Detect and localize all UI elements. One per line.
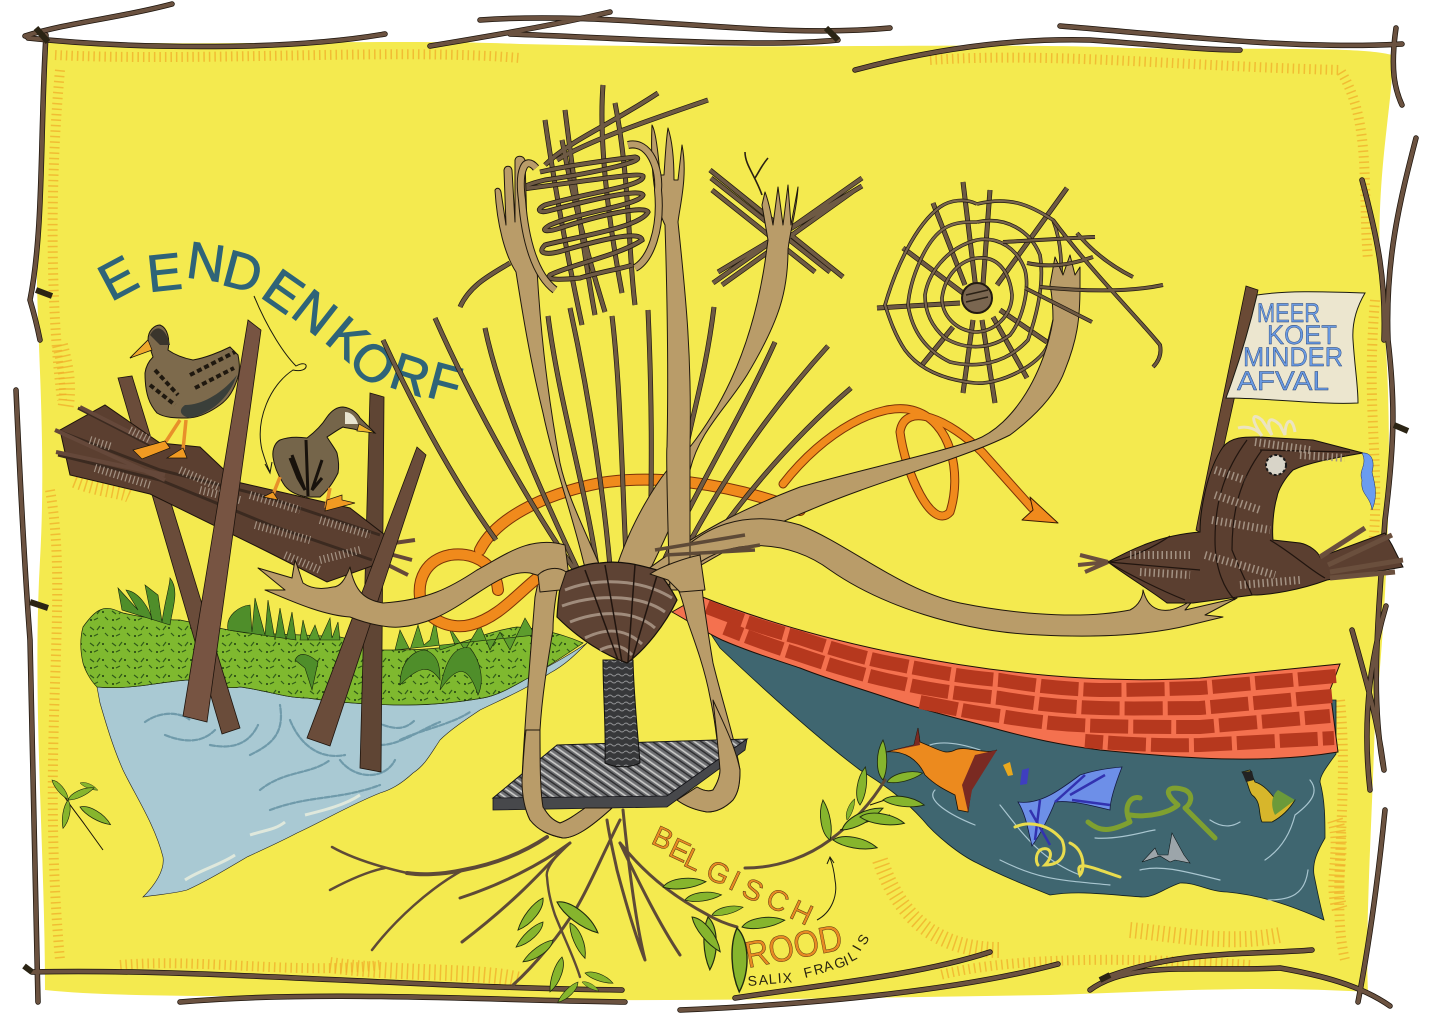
duck standing: [130, 325, 239, 459]
radial willow rods: [383, 307, 851, 590]
raised arm right with hand: [652, 125, 690, 590]
arm to X bundle: [610, 185, 798, 590]
roots under the willow: [330, 810, 737, 985]
plant branch: sprig beside canal: [745, 740, 925, 868]
plant name label: BELGISCH ROOD: ROOD: [742, 917, 846, 976]
brick wall: [672, 596, 1340, 759]
raised arm left with hand: [495, 156, 610, 590]
willow leaves on roots: [514, 876, 785, 1005]
arm to spider web: [640, 255, 1080, 590]
hands gripping basket: [538, 555, 705, 592]
slogan text on flag: MEER: [1257, 298, 1320, 328]
trash: green strap: [1088, 788, 1215, 838]
center woven basket: [557, 535, 760, 663]
trash: yellow ribbon: [1015, 824, 1120, 877]
crest feathers: [1238, 417, 1295, 436]
plant name label: BELGISCH ROOD: BELGISCH: [647, 820, 818, 932]
orange ribbon: [420, 409, 1058, 626]
trash: grey scrap: [1142, 833, 1190, 863]
trash: bottle: [1242, 770, 1295, 822]
grass tufts: [118, 578, 535, 695]
slogan text on flag: [1237, 298, 1343, 396]
back stakes: [118, 376, 384, 772]
polluted canal water: [695, 610, 1336, 920]
spider web weave: [877, 182, 1067, 403]
lower arm left around stem: [522, 570, 612, 838]
re-draw arm over board: [522, 730, 612, 838]
web tails over hand: [1003, 220, 1163, 367]
duck from behind: [263, 407, 375, 511]
slogan text on flag: MINDER: [1243, 342, 1343, 372]
left thumb wrapping panel: [521, 163, 555, 290]
grey board: [493, 739, 747, 810]
slogan text on flag: KOET: [1267, 320, 1337, 350]
front stakes: [183, 320, 426, 746]
trash: orange cloth: [886, 728, 1029, 812]
lower arm right around stem: [647, 557, 740, 812]
bird eye: [1266, 455, 1286, 475]
blue drip: [1361, 453, 1375, 510]
arrow: label to branch: [817, 857, 836, 920]
arm to duck nest with hand: [258, 542, 570, 627]
flagpole and flag: [1196, 286, 1365, 535]
grass bank: [81, 578, 583, 705]
right thumb wrapping panel: [628, 144, 659, 268]
arrow: label to duck: [254, 296, 306, 473]
title: EENDENKORF: EENDENKORF: [89, 231, 468, 416]
woven panel on raised hands: [460, 85, 708, 325]
re-draw right arm over board: [677, 700, 740, 812]
duck nest basket with stakes: [55, 320, 426, 772]
X-shaped rod bundle: [710, 152, 862, 285]
woven nest body: [60, 405, 385, 582]
woven coot bird: [1078, 417, 1403, 603]
arm to coot bird with hand: [660, 519, 1237, 636]
leaf sprig bottom left: [50, 778, 113, 850]
left pond: [97, 643, 587, 897]
plant name label: BELGISCH ROOD: [647, 820, 872, 989]
slogan text on flag: AFVAL: [1237, 366, 1329, 396]
plant name label: BELGISCH ROOD: SALIX FRAGILIS: [747, 931, 872, 989]
basket stem: [603, 660, 640, 767]
trash: blue plastic: [1018, 767, 1122, 846]
